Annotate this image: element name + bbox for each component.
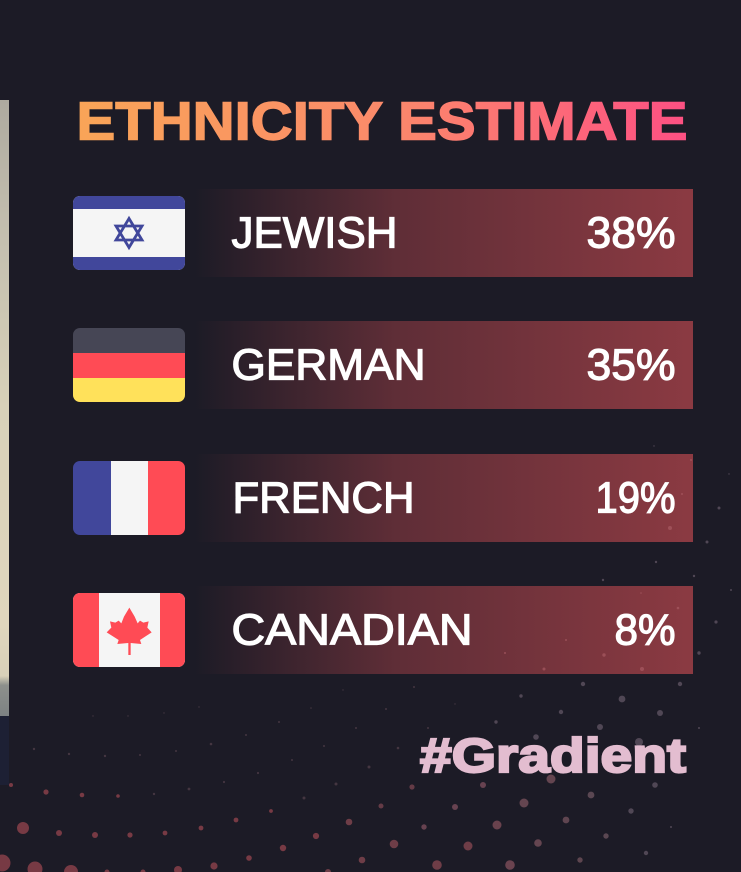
- decorative dot field, lower left: [0, 774, 609, 872]
- bar speckles: [504, 459, 692, 671]
- bar: Canadian: [195, 586, 693, 674]
- photo strip at left edge: [0, 100, 9, 785]
- value: 35%: 35%: [586, 340, 676, 390]
- value: 19%: 19%: [596, 474, 676, 522]
- row: Canadian: [73, 459, 693, 674]
- bar: German: [195, 321, 693, 409]
- value: 8%: 8%: [614, 606, 676, 654]
- row: Jewish: [73, 189, 693, 277]
- value: 38%: 38%: [586, 208, 676, 258]
- icon: Germany flag: [73, 328, 185, 402]
- label: French: FRENCH: [232, 474, 414, 522]
- row: French: [73, 454, 693, 542]
- icon: France flag: [73, 461, 185, 535]
- row: German: [73, 321, 693, 409]
- hashtag: #Gradient: [420, 730, 686, 783]
- bar: French: [195, 454, 693, 542]
- label: German: GERMAN: [232, 340, 426, 390]
- decorative dot field, right side: [494, 445, 732, 855]
- label: Jewish: JEWISH: [232, 208, 398, 258]
- icon: Canada flag: [73, 593, 185, 667]
- bar: Jewish: [195, 189, 693, 277]
- label: Canadian: CANADIAN: [232, 606, 472, 654]
- icon: Israel flag: [73, 196, 185, 270]
- title: ETHNICITY ESTIMATE: [76, 92, 688, 152]
- decorative dot field, faint small dots: [33, 686, 456, 800]
